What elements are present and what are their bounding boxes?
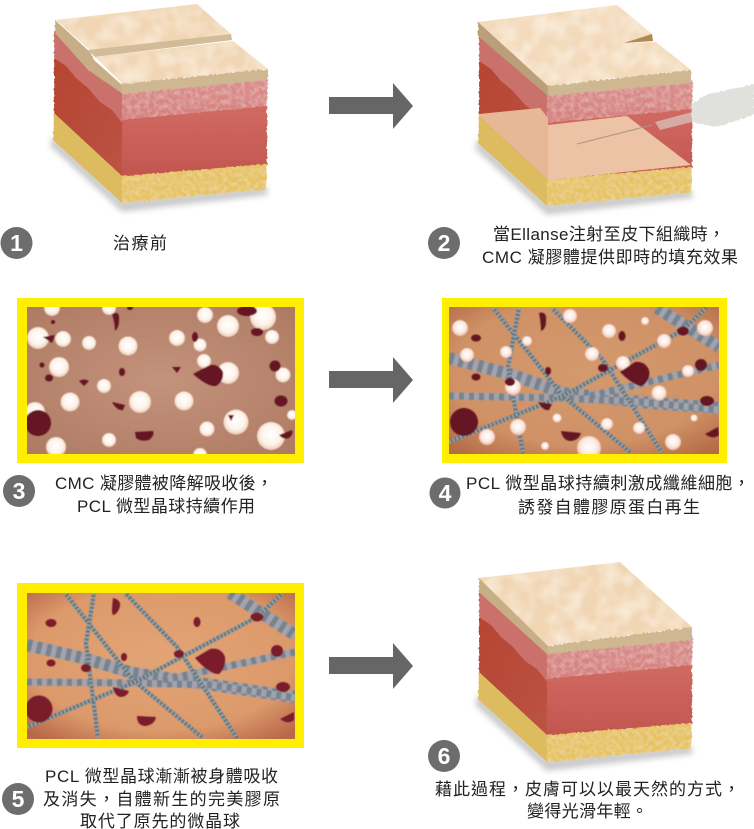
caption 6: [435, 780, 740, 821]
arrow 3: [329, 643, 413, 689]
badge 2: 2: [438, 230, 450, 256]
badge 4: [430, 478, 460, 508]
panel 3: microspheres after gel absorption: [17, 298, 304, 463]
skin top: [478, 5, 691, 86]
collagen fibres: [449, 308, 719, 453]
skin edge front: [548, 627, 692, 654]
badge 6: [428, 740, 460, 772]
panel 2: skin cube with injected filler: [475, 5, 754, 215]
caption 1: 治療前: [113, 234, 167, 253]
skin edge: first fold: [55, 20, 123, 94]
caption 2: CMC 凝膠體提供即時的填充效果: [482, 248, 738, 267]
caption 5: [43, 767, 280, 829]
blood cells: [450, 313, 719, 441]
caption 4: [466, 474, 750, 517]
caption 2: 當Ellanse注射至皮下組織時，: [493, 225, 725, 244]
skin top: [479, 562, 692, 646]
caption 3: PCL 微型晶球持續作用: [77, 497, 255, 516]
panel 6: smooth skin cube: [475, 562, 693, 771]
skin edge: [478, 22, 548, 96]
skin edge: [479, 578, 548, 655]
blood cells: [26, 598, 294, 726]
skin crack: [88, 34, 232, 57]
panel 1: skin cube before treatment: [50, 4, 268, 212]
panel 4: fibres forming around microspheres: [442, 298, 727, 463]
caption 3: CMC 凝膠體被降解吸收後，: [55, 474, 273, 493]
caption 4: PCL 微型晶球持續刺激成纖維細胞，: [466, 474, 750, 493]
blood cells: [25, 306, 293, 441]
microspheres: [452, 309, 713, 460]
badge 2: [428, 227, 460, 259]
caption 4: 誘發自體膠原蛋白再生: [518, 498, 700, 517]
caption 3: [55, 474, 273, 516]
skin top: back slab: [56, 4, 231, 52]
caption 5: PCL 微型晶球漸漸被身體吸收: [45, 767, 278, 786]
badge 4: 4: [439, 480, 452, 506]
badge 1: 1: [10, 230, 23, 256]
arrow 2: [329, 357, 413, 403]
badge 1: [0, 227, 32, 259]
caption 2: [482, 225, 738, 267]
skin edge: front: [122, 69, 268, 94]
caption 6: 變得光滑年輕。: [527, 802, 648, 821]
syringe: [577, 84, 754, 144]
skin crease: [624, 34, 653, 43]
caption 5: 及消失，自體新生的完美膠原: [43, 790, 280, 809]
arrow 1: [329, 83, 413, 129]
filler gel: [479, 108, 691, 180]
badge 3: [3, 475, 35, 507]
caption 6: 藉此過程，皮膚可以以最天然的方式，: [435, 780, 740, 799]
skin edge front: [548, 70, 691, 96]
badge 5: 5: [12, 786, 25, 812]
badge 5: [2, 783, 34, 815]
badge 6: 6: [438, 743, 450, 769]
collagen fibres: [27, 593, 295, 738]
badge 3: 3: [13, 478, 25, 504]
skin top: front slab: [95, 41, 268, 84]
microspheres: [27, 307, 295, 454]
panel 5: collagen replaces microspheres: [17, 583, 304, 748]
